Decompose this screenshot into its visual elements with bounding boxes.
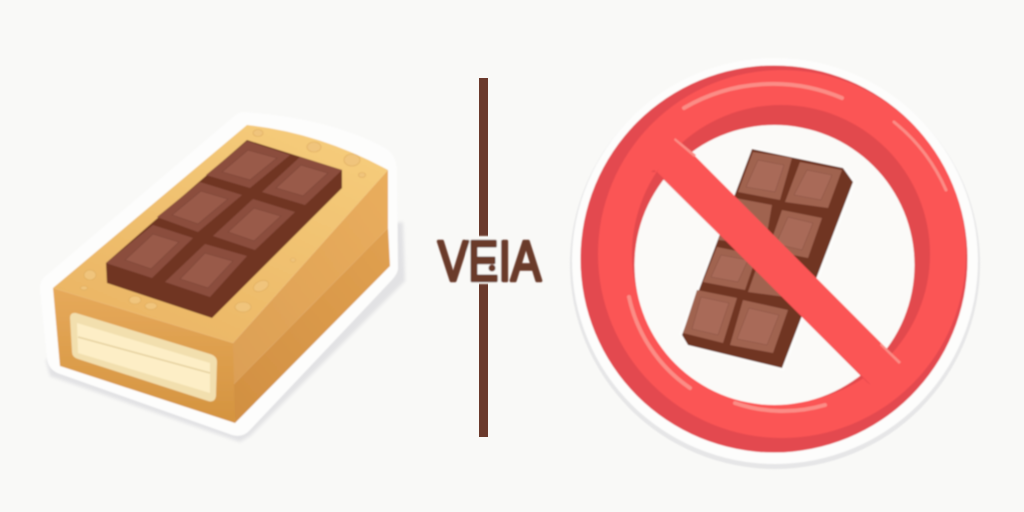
icon: chocolate-topped bar sticker <box>40 112 405 442</box>
chocolate bar <box>679 147 856 371</box>
label: VEIA: VEIA <box>438 230 541 293</box>
ring edge <box>580 66 968 452</box>
dot in the E <box>488 264 496 272</box>
square insets <box>125 150 328 288</box>
bar right face lower <box>232 228 390 423</box>
prohibition slash <box>657 138 900 383</box>
sticker backing <box>40 112 398 436</box>
chocolate squares <box>106 141 342 297</box>
ring hole <box>634 125 914 405</box>
sticker shadow <box>46 222 405 442</box>
cream filling <box>70 313 217 401</box>
ring inner dark band <box>632 105 930 403</box>
icon: no-chocolate prohibition sign <box>570 58 980 469</box>
chocolate bar on top <box>106 140 342 318</box>
sticker backing <box>572 58 978 464</box>
ring highlights <box>629 84 946 411</box>
sticker shadow <box>570 59 980 469</box>
bar top face <box>53 125 388 343</box>
bar front face <box>53 288 235 423</box>
ring face <box>598 70 966 438</box>
bar right face upper <box>232 170 388 386</box>
crumbs <box>80 130 366 312</box>
divider line lower <box>479 283 488 437</box>
chocolate squares <box>683 152 842 353</box>
divider line upper <box>479 78 488 237</box>
square insets <box>692 160 832 345</box>
